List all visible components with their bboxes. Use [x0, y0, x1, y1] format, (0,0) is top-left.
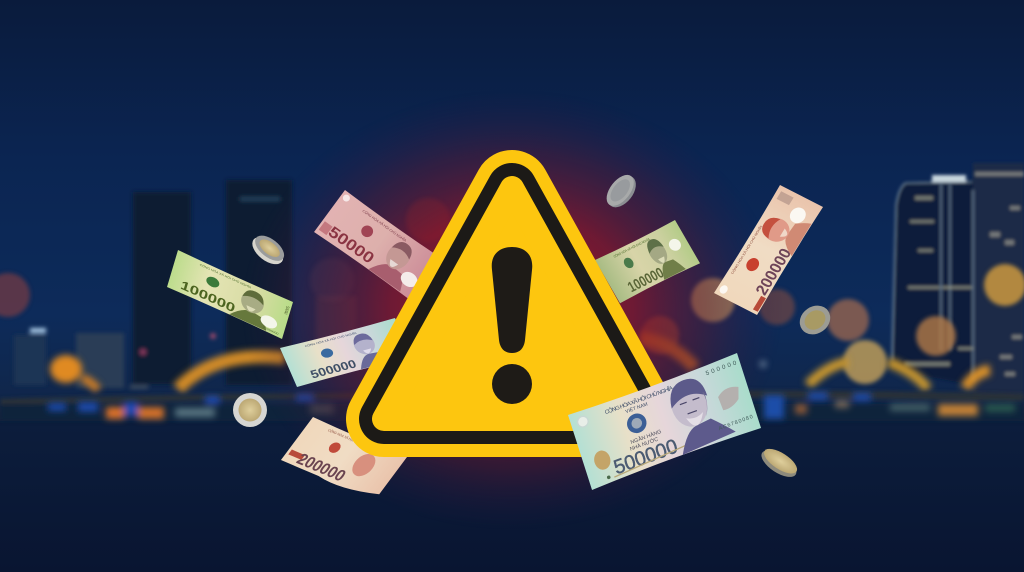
banknote: 200000 (bottom left): 200000 — [293, 450, 349, 485]
coin: right — [794, 300, 836, 340]
banknote: 100000 green (right): CỘNG HÒA XÃ HỘI CHỦ NGHĨA — [612, 236, 651, 259]
banknote: 500000 small (left) — [280, 318, 412, 387]
banknote: 500000 large (foreground) — [568, 353, 761, 490]
portrait — [661, 368, 737, 455]
green corner mark — [607, 475, 611, 480]
banknote: 500000 large (foreground): AC6780080 — [718, 414, 754, 432]
yellow inner field — [384, 188, 640, 419]
banknote: 100000 green (left): CỘNG HÒA XÃ HỘI CHỦ NGHĨA — [199, 262, 253, 290]
banknote: 200000 (right, tilted): CỘNG HÒA XÃ HỘI CHỦ NGHĨA — [730, 224, 764, 275]
banknote: 100000 green (left): 50000 — [283, 305, 290, 315]
bank label: NGÂN HÀNG — [630, 428, 662, 446]
banknote: 100000 green (right) — [595, 220, 700, 303]
banknote: 200000 (right, tilted): 200000 — [752, 245, 795, 298]
black inner border — [384, 188, 640, 419]
banknote: 500000 large (foreground): VIỆT NAM — [624, 400, 648, 415]
pale ring mark — [576, 415, 590, 429]
right towers — [892, 163, 1024, 398]
left towers — [14, 180, 356, 389]
coin: upper left — [247, 230, 289, 270]
banknote: 500000 small (left): CỘNG HÒA XÃ HỘI CHỦ NGHĨA — [304, 330, 358, 348]
colour stripe under denomination — [613, 445, 688, 477]
coin: bottom right — [757, 444, 802, 482]
banknote: 500000 large (foreground): NHÀ NƯỚC — [629, 436, 659, 453]
banknote: 100000 green (right): 100000 — [625, 264, 667, 295]
bank name header: CỘNG HÒA XÃ HỘI CHỦ NGHĨA — [604, 385, 674, 416]
coin: top centre — [601, 170, 642, 213]
seal motif — [592, 448, 613, 472]
banknote: 200000 (right, tilted) — [714, 185, 823, 315]
red glow behind warning sign — [242, 90, 782, 530]
banknote: 100000 green (left) — [167, 250, 293, 339]
banknote: 50000 pink — [314, 190, 441, 300]
yellow outer rim — [384, 188, 640, 419]
exclamation mark — [492, 247, 532, 404]
banknote: 200000 (bottom left) — [280, 417, 407, 501]
banknote: 50000 pink: 50000 — [325, 224, 377, 267]
banknote: 100000 green (left): V0000000 — [262, 326, 279, 336]
warning triangle sign — [384, 188, 640, 419]
banknote: 500000 small (left): 500000 — [308, 357, 358, 381]
banknote: 200000 (bottom left): CỘNG HÒA XÃ HỘI CHỦ NGHĨA — [327, 427, 373, 450]
bridge and city lights on the water — [0, 390, 1024, 421]
bokeh lights — [0, 198, 1024, 384]
coin: lower left — [233, 393, 267, 427]
serial numbers: 500000 — [705, 359, 738, 377]
banknote: 50000 pink: CỘNG HÒA XÃ HỘI CHỦ NGHĨA — [362, 208, 408, 243]
dragon bridge arches — [50, 338, 990, 390]
clear window — [717, 385, 744, 411]
denomination: 500000 — [611, 436, 680, 479]
national emblem — [625, 411, 649, 436]
banknote: 100000 green (left): 100000 — [179, 278, 237, 316]
